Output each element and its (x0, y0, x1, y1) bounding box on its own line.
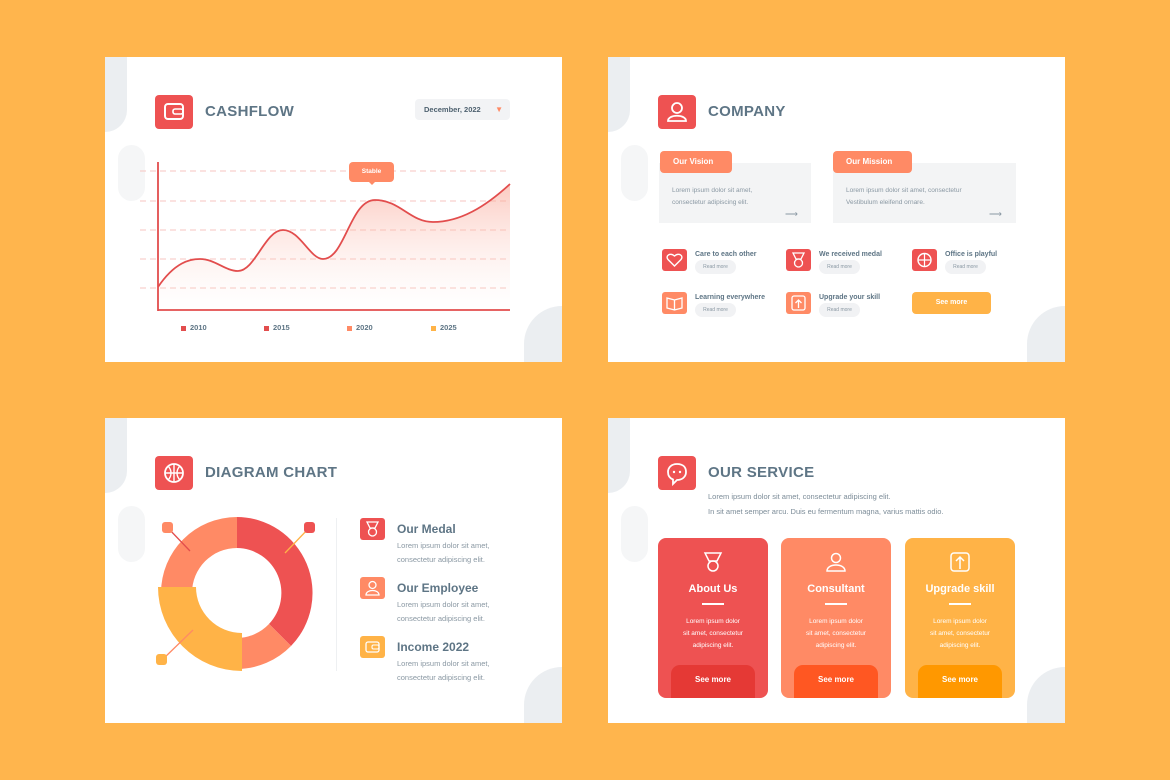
item: care (662, 249, 756, 274)
icon: ball (155, 456, 193, 490)
heading: cashflow: CASHFLOW (205, 103, 294, 120)
item: our employee: Lorem ipsum dolor sit amet, (397, 600, 490, 609)
card: mission: ⟶ (989, 209, 1002, 219)
panel: our service (608, 418, 1065, 723)
dropdown: date: December, 2022 (424, 105, 481, 114)
heading: diagram chart: DIAGRAM CHART (205, 464, 337, 481)
legend: 2010 (190, 323, 207, 332)
donut chart (156, 517, 315, 671)
button: see more (912, 292, 991, 314)
item: our medal: Lorem ipsum dolor sit amet, (397, 541, 490, 550)
item: our medal (360, 518, 490, 564)
legend: 2015 (273, 323, 290, 332)
card: about us: sit amet, consectetur (683, 630, 743, 637)
card: mission: Vestibulum eleifend ornare. (846, 199, 925, 206)
card: mission (833, 151, 1016, 223)
item: income (360, 636, 490, 682)
text: intro: Lorem ipsum dolor sit amet, consectetur adipiscing elit. (708, 492, 891, 501)
item: learning: Learning everywhere (695, 294, 765, 301)
item: our employee: consectetur adipiscing elit. (397, 614, 485, 623)
item: care: Care to each other (695, 251, 756, 258)
panel: company (608, 57, 1065, 362)
card: upgrade skill: Lorem ipsum dolor (933, 618, 987, 625)
card: about us: adipiscing elit. (693, 642, 733, 649)
item: upgrade (786, 292, 880, 317)
card: about us: About Us (689, 583, 737, 595)
item: income: Lorem ipsum dolor sit amet, (397, 659, 490, 668)
card: consultant: adipiscing elit. (816, 642, 856, 649)
card: mission: Lorem ipsum dolor sit amet, consectetur (846, 187, 962, 194)
heading: our service: OUR SERVICE (708, 464, 814, 481)
icon: chat (658, 456, 696, 490)
card: upgrade skill: Upgrade skill (925, 583, 995, 595)
item: our medal: consectetur adipiscing elit. (397, 555, 485, 564)
callout: stable: Stable (362, 168, 381, 175)
item: upgrade: Read more (827, 307, 852, 313)
card: upgrade skill: sit amet, consectetur (930, 630, 990, 637)
card: consultant (781, 538, 891, 698)
card: upgrade skill (905, 538, 1015, 698)
dropdown: date (415, 99, 510, 120)
panel: cashflow (105, 57, 562, 362)
card: vision (659, 151, 811, 223)
item: care: Read more (703, 264, 728, 270)
dropdown: date: ▼ (495, 105, 503, 114)
item: medal: We received medal (819, 251, 882, 258)
callout: stable (349, 162, 394, 182)
card: vision: consectetur adipiscing elit. (672, 199, 748, 206)
item: our employee (360, 577, 490, 623)
item: learning: Read more (703, 307, 728, 313)
icon: person (658, 95, 696, 129)
card: upgrade skill: See more (942, 675, 978, 684)
card: consultant: Consultant (807, 583, 865, 595)
card: vision: Lorem ipsum dolor sit amet, (672, 187, 752, 194)
card: about us: See more (695, 675, 731, 684)
item: income: consectetur adipiscing elit. (397, 673, 485, 682)
item: medal: Read more (827, 264, 852, 270)
card: vision: ⟶ (785, 209, 798, 219)
legend (181, 323, 457, 332)
item: our medal: Our Medal (397, 522, 456, 536)
card: consultant: sit amet, consectetur (806, 630, 866, 637)
legend: 2020 (356, 323, 373, 332)
heading: company: COMPANY (708, 103, 786, 120)
text: intro (708, 492, 944, 516)
card: consultant: Lorem ipsum dolor (809, 618, 863, 625)
button: see more: See more (936, 299, 967, 306)
item: playful (912, 249, 997, 274)
card: about us: Lorem ipsum dolor (686, 618, 740, 625)
card: about us (658, 538, 768, 698)
item: our employee: Our Employee (397, 581, 478, 595)
card: vision: Our Vision (673, 157, 713, 166)
item: upgrade: Upgrade your skill (819, 294, 880, 301)
item: learning (662, 292, 765, 317)
item: playful: Office is playful (945, 251, 997, 258)
icon: wallet (155, 95, 193, 129)
card: consultant: See more (818, 675, 854, 684)
item: playful: Read more (953, 264, 978, 270)
legend: 2025 (440, 323, 457, 332)
card: mission: Our Mission (846, 157, 892, 166)
item: medal (786, 249, 882, 274)
panel: diagram chart (105, 418, 562, 723)
item: income: Income 2022 (397, 640, 469, 654)
card: upgrade skill: adipiscing elit. (940, 642, 980, 649)
text: intro: In sit amet semper arcu. Duis eu fermentum magna, varius mattis odio. (708, 507, 944, 516)
line chart (140, 162, 510, 311)
